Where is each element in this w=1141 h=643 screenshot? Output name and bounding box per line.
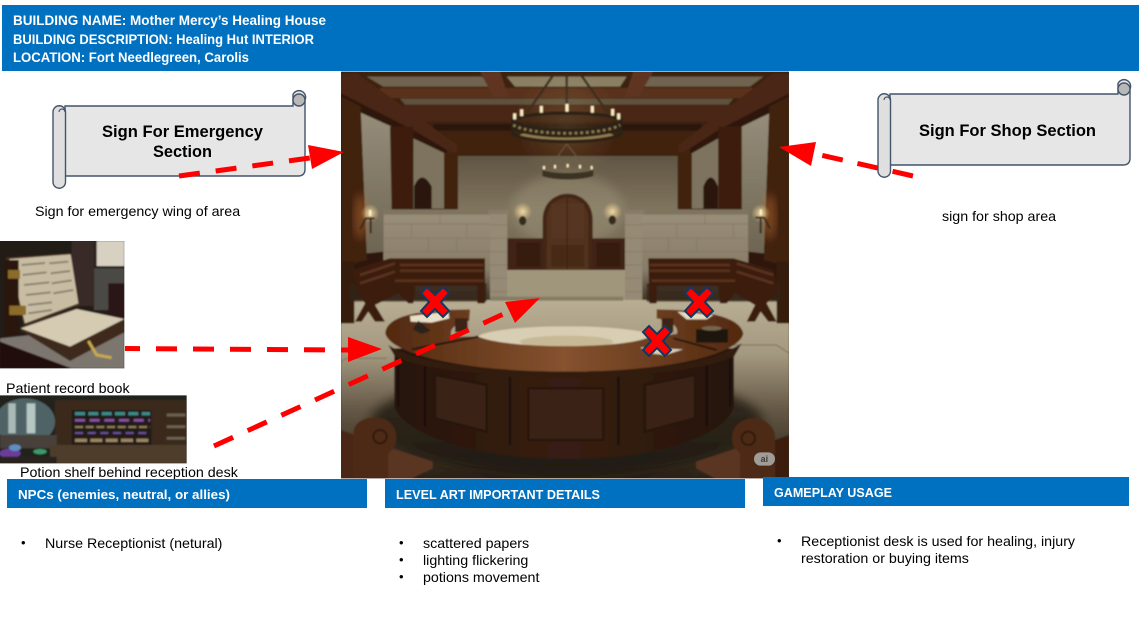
- red X markers on desk: [421, 287, 713, 356]
- list: level art: potions movement: [423, 570, 539, 586]
- arrow: shop sign to right wall: [779, 142, 913, 176]
- list: gameplay usage: restoration or buying items: [801, 551, 969, 567]
- rear floor: [507, 270, 625, 300]
- reception desk: [370, 309, 763, 475]
- panel: level art important details: [385, 479, 745, 586]
- scroll sign: emergency section: Sign For Emergency: [102, 123, 264, 141]
- scroll sign: emergency section: Section: [153, 143, 212, 161]
- arrow: potion shelf to behind desk: [214, 298, 540, 446]
- side walls and pillars: [342, 97, 789, 267]
- marker: left desk: [421, 287, 449, 317]
- ceiling: [341, 72, 789, 156]
- heading: level art: [385, 479, 745, 508]
- wall sconces: [360, 202, 770, 233]
- list: level art: •: [399, 535, 404, 550]
- list: level art: lighting flickering: [423, 553, 528, 569]
- heading: NPCs: NPCs (enemies, neutral, or allies): [18, 487, 230, 502]
- heading: gameplay usage: GAMEPLAY USAGE: [774, 485, 892, 500]
- arrow: emergency sign to left wall: [179, 145, 344, 176]
- foreground bench ends: [341, 417, 789, 478]
- scroll sign: emergency section: [53, 91, 306, 188]
- caption: shop sign: sign for shop area: [942, 209, 1056, 225]
- list: level art: •: [399, 569, 404, 584]
- header banner: LOCATION: Fort Needlegreen, Carolis: [13, 50, 249, 65]
- scene illustration: healing hut interior: [340, 70, 790, 480]
- list: level art: •: [399, 552, 404, 567]
- thumbnail: patient record book: [0, 238, 128, 372]
- ai watermark: [754, 452, 775, 466]
- scroll sign: shop section: [878, 80, 1131, 177]
- caption: potion shelf: Potion shelf behind reception desk: [20, 465, 239, 481]
- panel: NPCs: [7, 479, 367, 552]
- header banner: BUILDING NAME: Mother Mercy’s Healing House: [13, 13, 326, 28]
- marker: right desk: [685, 287, 713, 317]
- arrow: record book to desk: [125, 337, 382, 362]
- waiting benches: [341, 258, 790, 323]
- list: NPCs: •: [21, 535, 26, 550]
- list: gameplay usage: •: [777, 533, 782, 548]
- stone partition walls: [383, 209, 749, 301]
- carpet floor: [341, 300, 789, 478]
- marker: desk centre right: [643, 326, 671, 356]
- header banner: BUILDING DESCRIPTION: Healing Hut INTERIOR: [13, 32, 314, 47]
- ai watermark: ai: [761, 454, 768, 464]
- list: level art: scattered papers: [423, 536, 529, 552]
- list: NPCs: Nurse Receptionist (netural): [45, 536, 222, 552]
- distant chandelier: [542, 144, 593, 179]
- list: gameplay usage: [777, 533, 1076, 567]
- heading: level art: LEVEL ART IMPORTANT DETAILS: [396, 487, 600, 502]
- list: gameplay usage: Receptionist desk is used for healing, injury: [801, 534, 1076, 550]
- main chandelier: [510, 72, 622, 164]
- panel: gameplay usage: [763, 477, 1129, 567]
- thumbnail: potion shelf: [0, 392, 190, 467]
- heading: NPCs: [7, 479, 367, 508]
- list: level art: [399, 535, 539, 586]
- door: [543, 194, 593, 270]
- back wall: [457, 156, 678, 273]
- heading: gameplay usage: [763, 477, 1129, 506]
- caption: emergency sign: Sign for emergency wing of area: [35, 204, 240, 220]
- desk objects: papers, books, box: [410, 312, 728, 355]
- caption: patient record book: Patient record book: [6, 381, 130, 397]
- scroll sign: shop section: Sign For Shop Section: [919, 122, 1096, 140]
- header banner: [2, 5, 1139, 71]
